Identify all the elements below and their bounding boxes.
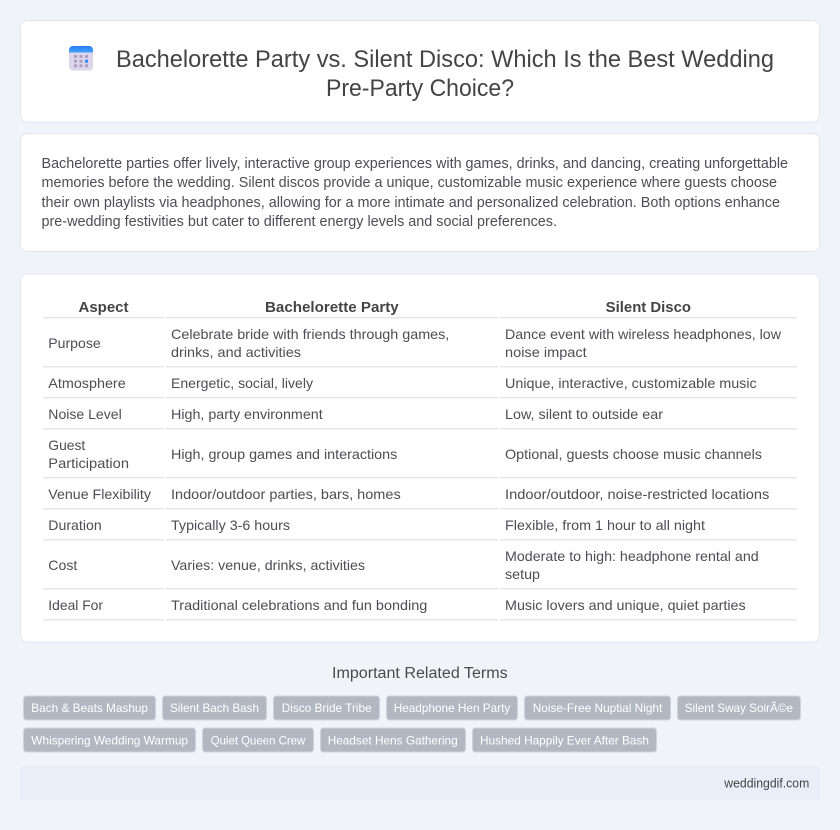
- tag: Hushed Happily Ever After Bash: [480, 734, 649, 748]
- table row: Cost: setup: [505, 566, 540, 582]
- table row: Guest Participation: Guest: [48, 437, 85, 453]
- table header: Silent Disco: [606, 300, 691, 316]
- text block: description: their own playlists via headphones, allowing for a more intimate and personalized celebration. Both options enhance: [42, 195, 780, 211]
- tag: Quiet Queen Crew: [211, 734, 306, 748]
- title: Pre-Party Choice?: [326, 75, 514, 102]
- tag: [274, 696, 380, 720]
- table row: Purpose: Celebrate bride with friends through games,: [171, 326, 449, 342]
- table row: Purpose: noise impact: [505, 344, 587, 360]
- tag: [24, 728, 196, 752]
- table row: Duration: Typically 3-6 hours: [171, 517, 290, 533]
- heading: related terms: Important Related Terms: [332, 665, 508, 682]
- icon: calendar: [69, 46, 93, 70]
- panel: title card: [20, 20, 820, 122]
- table row: Guest Participation: Optional, guests choose music channels: [505, 446, 762, 462]
- footer bar: [20, 766, 820, 800]
- table row: Noise Level: High, party environment: [171, 406, 323, 422]
- tag: Whispering Wedding Warmup: [31, 734, 188, 748]
- tag: [320, 728, 466, 752]
- table row: Venue Flexibility: [43, 486, 797, 510]
- text block: description: memories before the wedding. Silent discos provide a unique, customizable music experience where guests choose: [42, 175, 777, 191]
- tag: [202, 728, 314, 752]
- table row: Cost: Varies: venue, drinks, activities: [171, 557, 365, 573]
- table row: Cost: Moderate to high: headphone rental and: [505, 548, 759, 564]
- tag: Headset Hens Gathering: [328, 734, 458, 748]
- text block: description: pre-wedding festivities but cater to different energy levels and social preferences.: [42, 214, 557, 230]
- table row: Venue Flexibility: Indoor/outdoor, noise-restricted locations: [505, 486, 769, 502]
- table row: Duration: Flexible, from 1 hour to all night: [505, 517, 705, 533]
- table header: Bachelorette Party: [265, 300, 399, 316]
- footer source text: weddingdif.com: [723, 776, 809, 790]
- panel: description: [20, 134, 820, 252]
- table row: Duration: Duration: [48, 517, 102, 533]
- text block: description: [42, 156, 788, 230]
- table row: Atmosphere: Unique, interactive, customizable music: [505, 375, 757, 391]
- table row: Ideal For: Ideal For: [48, 597, 103, 613]
- tag: [678, 696, 800, 720]
- table row: Noise Level: Low, silent to outside ear: [505, 406, 663, 422]
- tag: [162, 696, 266, 720]
- table row: Ideal For: Music lovers and unique, quiet parties: [505, 597, 746, 613]
- tag: Headphone Hen Party: [394, 701, 510, 715]
- table row: Noise Level: [43, 406, 797, 430]
- table row: Purpose: [43, 326, 797, 368]
- tag: [386, 696, 518, 720]
- table row: Noise Level: Noise Level: [48, 406, 122, 422]
- table row: Purpose: Dance event with wireless headphones, low: [505, 326, 782, 342]
- table row: Atmosphere: Atmosphere: [48, 375, 126, 391]
- table row: Duration: [43, 517, 797, 540]
- text block: description: Bachelorette parties offer lively, interactive group experiences with games, drinks, and dancing, creating unforgettable: [42, 156, 788, 172]
- tag: Silent Sway SoirÃ©e: [685, 701, 793, 715]
- tag: Noise-Free Nuptial Night: [533, 701, 663, 715]
- panel: related term tags: [24, 696, 800, 752]
- table row: Purpose: drinks, and activities: [171, 344, 301, 360]
- table row: Venue Flexibility: Indoor/outdoor parties, bars, homes: [171, 486, 401, 502]
- panel: comparison table: [20, 274, 820, 642]
- tag: Silent Bach Bash: [170, 701, 259, 715]
- table row: Guest Participation: Participation: [48, 455, 129, 471]
- tag: Bach & Beats Mashup: [31, 701, 148, 715]
- table row: Ideal For: [43, 597, 797, 620]
- table row: Atmosphere: [43, 375, 797, 398]
- table row: Guest Participation: High, group games and interactions: [171, 446, 397, 462]
- table header: Aspect: [78, 300, 129, 316]
- tag: [524, 696, 670, 720]
- table row: Cost: Cost: [48, 557, 77, 573]
- table row: Venue Flexibility: Venue Flexibility: [48, 486, 151, 502]
- title: [116, 46, 774, 102]
- table row: Guest Participation: [43, 437, 797, 478]
- title: Bachelorette Party vs. Silent Disco: Which Is the Best Wedding: [116, 46, 774, 73]
- table row: Cost: [43, 548, 797, 590]
- table row: Atmosphere: Energetic, social, lively: [171, 375, 313, 391]
- tag: [24, 696, 156, 720]
- table header: [43, 300, 797, 318]
- tag: Disco Bride Tribe: [282, 701, 372, 715]
- tag: [472, 728, 656, 752]
- table row: Ideal For: Traditional celebrations and fun bonding: [171, 597, 427, 613]
- table row: Purpose: Purpose: [48, 335, 101, 351]
